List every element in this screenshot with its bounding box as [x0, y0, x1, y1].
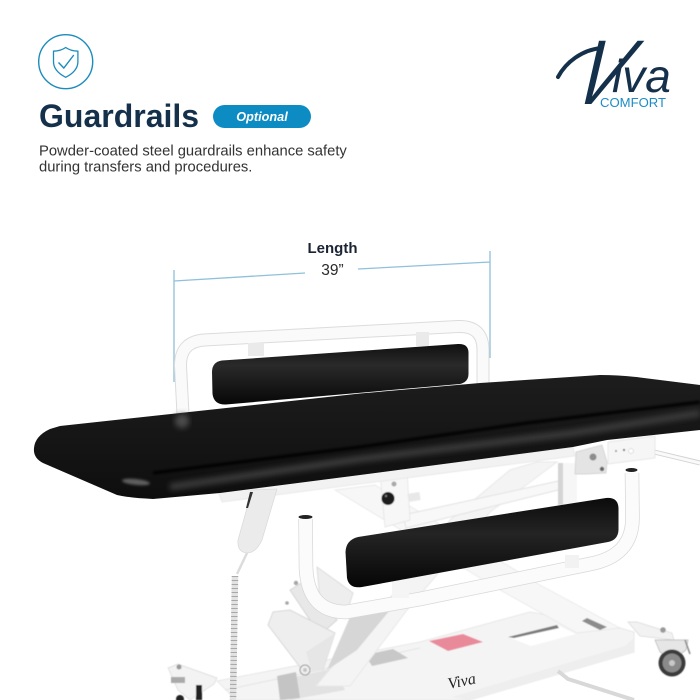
near guardrail pad [346, 498, 618, 587]
knob [382, 492, 394, 505]
description text: during transfers and procedures. [39, 160, 252, 176]
dimension: length 39 inches [174, 240, 490, 382]
badge: optional: Optional [236, 110, 288, 124]
icon: shield with check [39, 35, 93, 89]
pink label [429, 634, 483, 651]
logo: Viva Comfort: iva [612, 50, 671, 102]
far guardrail [180, 326, 483, 414]
base logo: Viva [446, 670, 477, 693]
post: far [558, 463, 577, 505]
power cable [558, 671, 634, 700]
table frame and lift mechanism [217, 436, 655, 700]
far rail stub right [650, 451, 700, 463]
second scissor arm [335, 485, 620, 633]
motor [268, 567, 353, 675]
dimension: length 39 inches: Length [308, 240, 358, 257]
underframe strip [218, 447, 575, 502]
base slot left [365, 649, 408, 666]
logo: Viva Comfort: COMFORT [600, 95, 666, 110]
main scissor arm [316, 462, 557, 686]
hinge bracket [575, 445, 607, 474]
base slot right [508, 625, 576, 646]
table top [34, 375, 700, 499]
mid arm to far post [403, 480, 566, 528]
logo: Viva Comfort: V [554, 21, 655, 124]
left caster [168, 664, 217, 700]
badge: optional [213, 105, 311, 128]
description text: Powder-coated steel guardrails enhance safety [39, 144, 347, 160]
near guardrail [298, 468, 638, 612]
base plate [217, 612, 634, 700]
far guardrail pad [212, 344, 468, 405]
right caster [628, 622, 690, 676]
post: near [380, 470, 410, 527]
title: Guardrails [39, 98, 199, 134]
dimension: length 39 inches: 39” [321, 262, 344, 279]
control pendant and coiled cord [233, 489, 277, 700]
adjuster plate [608, 436, 655, 464]
